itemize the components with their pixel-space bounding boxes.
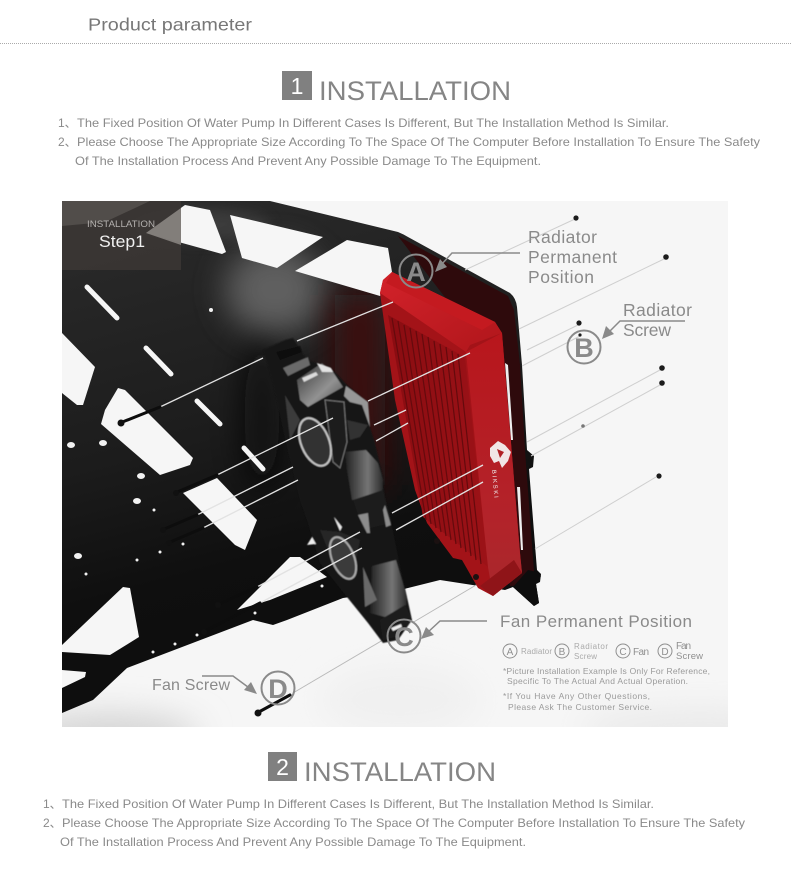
section 2 heading: INSTALLATION [304, 757, 496, 787]
legend: Radiator [574, 642, 608, 651]
section 1 heading: 1 [291, 73, 303, 99]
radiator logo [490, 441, 511, 498]
callout A: radiator permanent position [400, 227, 617, 288]
legend: A [507, 647, 514, 658]
panel slots and small holes [67, 287, 324, 654]
soft floor shadow [62, 702, 198, 727]
callout D: fan screw [152, 672, 294, 704]
panel cut-outs [62, 205, 393, 688]
section 2 text block: Of The Installation Process And Prevent Any Possible Damage To The Equipment. [60, 835, 526, 849]
callout A: radiator permanent position: A [406, 257, 426, 287]
legend: B [559, 647, 566, 658]
legend: Screw [676, 651, 703, 662]
section 1 text block: 1、 [58, 116, 77, 130]
panel sheen [205, 208, 397, 488]
radiator body [380, 272, 522, 596]
callout C: fan permanent position: C [394, 622, 414, 652]
callout C: fan permanent position [388, 612, 692, 652]
step badge: Step1 [99, 232, 145, 251]
notes: *If You Have Any Other Questions, [503, 691, 650, 701]
radiator [380, 272, 522, 596]
legend: C [619, 647, 627, 658]
fan assembly [263, 338, 412, 643]
notes [503, 666, 710, 712]
radiator fin area [388, 315, 488, 567]
step badge [62, 201, 181, 270]
callout B: radiator screw: Screw [623, 320, 671, 340]
section 2 text block: 2、 [43, 816, 62, 830]
callout B: radiator screw: B [574, 333, 594, 363]
upper fan bracket [283, 357, 310, 376]
section 1 heading: INSTALLATION [319, 76, 511, 106]
section 1 text block: Please Choose The Appropriate Size According To The Space Of The Computer Before Installation To Ensure The Safety [77, 135, 760, 149]
legend: Radiator [521, 647, 552, 656]
notes: *Picture Installation Example Is Only For Reference, [503, 666, 710, 676]
callout D: fan screw: D [268, 674, 288, 704]
long black fan screws [120, 407, 290, 713]
legend: Fan [633, 647, 649, 658]
section 1 text block [58, 116, 760, 168]
section 2 text block: Please Choose The Appropriate Size According To The Space Of The Computer Before Installation To Ensure The Safety [62, 816, 745, 830]
callout B: radiator screw: Radiator [623, 300, 692, 320]
radiator logo: BIKSKI [490, 470, 498, 498]
small radiator screws [573, 215, 669, 479]
small white gaps in fan [334, 517, 342, 531]
legend: D [661, 647, 669, 658]
dark red strip of the panel behind radiator [398, 236, 535, 586]
section 2 text block: The Fixed Position Of Water Pump In Different Cases Is Different, But The Installation Method Is Similar. [62, 797, 654, 811]
step badge: INSTALLATION [87, 219, 155, 230]
radiator top cap [380, 272, 502, 352]
thin grey screw lines on the background [465, 219, 664, 549]
callout C: fan permanent position: Fan Permanent Position [500, 612, 692, 631]
fan silhouette [263, 338, 412, 643]
upper fan frame surfaces [297, 363, 343, 407]
legend: Fan [676, 641, 691, 652]
white gap at panel edge [505, 363, 523, 550]
panel: installation step 1 illustration [62, 201, 728, 727]
radiator bolts [434, 538, 440, 544]
callout A: radiator permanent position: Radiator [528, 227, 597, 247]
radiator side tank [466, 333, 522, 596]
black lower tip of the panel [513, 570, 541, 606]
callout B: radiator screw [568, 300, 692, 364]
notes: Please Ask The Customer Service. [508, 702, 652, 712]
callout D: fan screw: Fan Screw [152, 677, 230, 694]
legend [502, 642, 703, 659]
lower fan hub [328, 535, 358, 581]
legend: Screw [574, 652, 597, 661]
section 1 text block: Of The Installation Process And Prevent Any Possible Damage To The Equipment. [75, 154, 541, 168]
section 2 text block [43, 797, 745, 849]
callout A: radiator permanent position: Permanent [528, 247, 617, 267]
callout A: radiator permanent position: Position [528, 267, 594, 287]
section 1 text block: The Fixed Position Of Water Pump In Different Cases Is Different, But The Installation Method Is Similar. [77, 116, 669, 130]
section 2 text block: 1、 [43, 797, 62, 811]
fan foot [392, 606, 404, 614]
long white screw lines [160, 302, 483, 603]
page header: Product parameter: Product parameter [88, 14, 252, 34]
section 2 heading: 2 [276, 754, 289, 780]
case panel base [62, 201, 541, 713]
notes: Specific To The Actual And Actual Operation. [507, 676, 688, 686]
upper fan hub [297, 416, 333, 468]
lower fan frame surfaces [355, 490, 392, 522]
section 1 text block: 2、 [58, 135, 77, 149]
